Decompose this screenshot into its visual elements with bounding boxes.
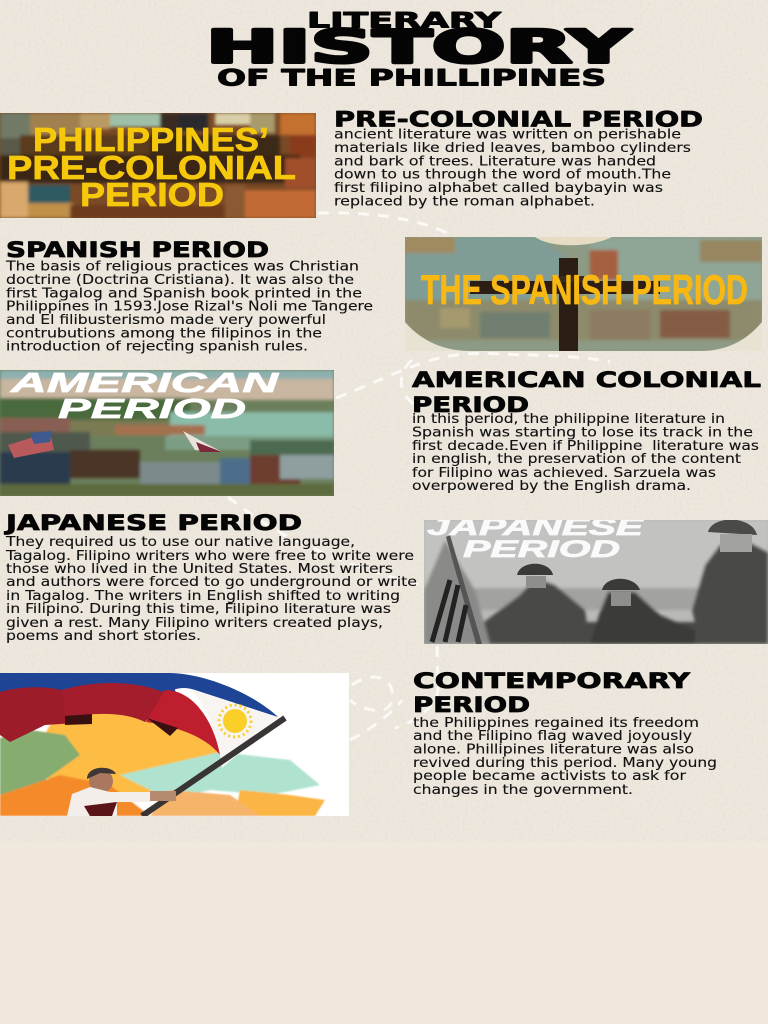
panel: japanese image xyxy=(424,514,768,644)
body text: materials like dried leaves, bamboo cylinders xyxy=(334,141,691,156)
panel: contemporary image xyxy=(0,673,349,816)
heading: PERIOD xyxy=(413,693,530,717)
body text: in Filipino. During this time, Filipino literature was xyxy=(6,602,391,617)
heading: SPANISH PERIOD xyxy=(6,238,269,262)
body text: for Filipino was achieved. Sarzuela was xyxy=(412,466,716,481)
image text: PERIOD xyxy=(80,176,224,213)
body text: introduction of rejecting spanish rules. xyxy=(6,340,308,355)
body text: ancient literature was written on perishable xyxy=(334,128,681,142)
body text: Tagalog. Filipino writers who were free to write were xyxy=(5,549,414,564)
body text: in Tagalog. The writers in English shifted to writing xyxy=(6,589,400,604)
body text: the Philippines regained its freedom xyxy=(413,716,699,731)
title line: history: HISTORY xyxy=(206,20,633,74)
person xyxy=(67,768,176,816)
body text: given a rest. Many Filipino writers created plays, xyxy=(6,616,383,631)
panel: pre-colonial image xyxy=(0,113,316,218)
body text: first Tagalog and Spanish book printed in the xyxy=(6,286,362,301)
heading: AMERICAN COLONIAL xyxy=(412,368,761,392)
image text xyxy=(9,372,280,419)
body text: poems and short stories. xyxy=(6,629,201,644)
philippine flag xyxy=(0,673,285,816)
panel: pre-colonial text xyxy=(334,108,703,209)
panel: spanish image xyxy=(405,237,762,351)
body text: and authors were forced to go underground or write xyxy=(6,575,417,590)
panel: contemporary text xyxy=(413,669,717,798)
panel: spanish text xyxy=(5,238,373,355)
heading: PERIOD xyxy=(412,393,529,417)
body text: overpowered by the English drama. xyxy=(412,479,691,494)
body text xyxy=(5,260,373,355)
body text: Philippines in 1593.Jose Rizal's Noli me Tangere xyxy=(6,300,373,315)
body text: revived during this period. Many young xyxy=(413,756,717,771)
body text: replaced by the roman alphabet. xyxy=(334,194,595,209)
body text: changes in the government. xyxy=(413,783,633,798)
body text: people became activists to ask for xyxy=(413,769,687,784)
heading: CONTEMPORARY xyxy=(413,669,691,693)
body text xyxy=(412,412,759,494)
heading: JAPANESE PERIOD xyxy=(3,511,302,535)
image text: JAPANESE xyxy=(427,514,645,541)
body text: The basis of religious practices was Christian xyxy=(5,260,359,274)
body text: in english, the preservation of the content xyxy=(412,452,741,467)
body text: They required us to use our native language, xyxy=(5,535,355,550)
body text: first filipino alphabet called baybayin was xyxy=(334,181,663,196)
image text: PERIOD xyxy=(58,393,246,424)
image text: PHILIPPINES’ xyxy=(33,121,269,158)
title xyxy=(206,8,633,92)
dashed connector lines xyxy=(228,213,610,740)
body text: first decade.Even if Philippine literature was xyxy=(412,439,759,454)
body text: and El filibusterismo made very powerful xyxy=(6,313,326,328)
image text: AMERICAN xyxy=(9,367,279,398)
body text: alone. Phillipines literature was also xyxy=(413,742,694,758)
body text: and the Filipino flag waved joyously xyxy=(413,729,692,744)
panel: american image xyxy=(0,367,334,496)
body text: those who lived in the United States. Most writers xyxy=(6,562,393,577)
image text: PRE-COLONIAL xyxy=(7,149,296,186)
panel: japanese text xyxy=(3,511,417,644)
body text: and bark of trees. Literature was handed xyxy=(334,154,656,169)
heading xyxy=(413,669,691,717)
image text: PERIOD xyxy=(463,536,620,563)
heading xyxy=(412,368,761,417)
body text xyxy=(413,716,717,798)
body text: contrubutions among the filipinos in the xyxy=(6,326,322,341)
watercolor map xyxy=(0,709,325,816)
body text: doctrine (Doctrina Cristiana). It was also the xyxy=(6,273,354,288)
image text xyxy=(426,520,644,558)
body text: Spanish was starting to lose its track in the xyxy=(412,426,753,440)
image text xyxy=(9,127,296,207)
panel: american text xyxy=(412,368,761,494)
heading: PRE-COLONIAL PERIOD xyxy=(334,108,703,132)
title line: literary: LITERARY xyxy=(307,8,502,32)
title line: of the phillipines: OF THE PHILLIPINES xyxy=(217,66,606,92)
body text: in this period, the philippine literature in xyxy=(412,412,725,427)
body text xyxy=(334,128,691,209)
body text xyxy=(5,535,417,644)
body text: down to us through the word of mouth.The xyxy=(334,168,671,183)
